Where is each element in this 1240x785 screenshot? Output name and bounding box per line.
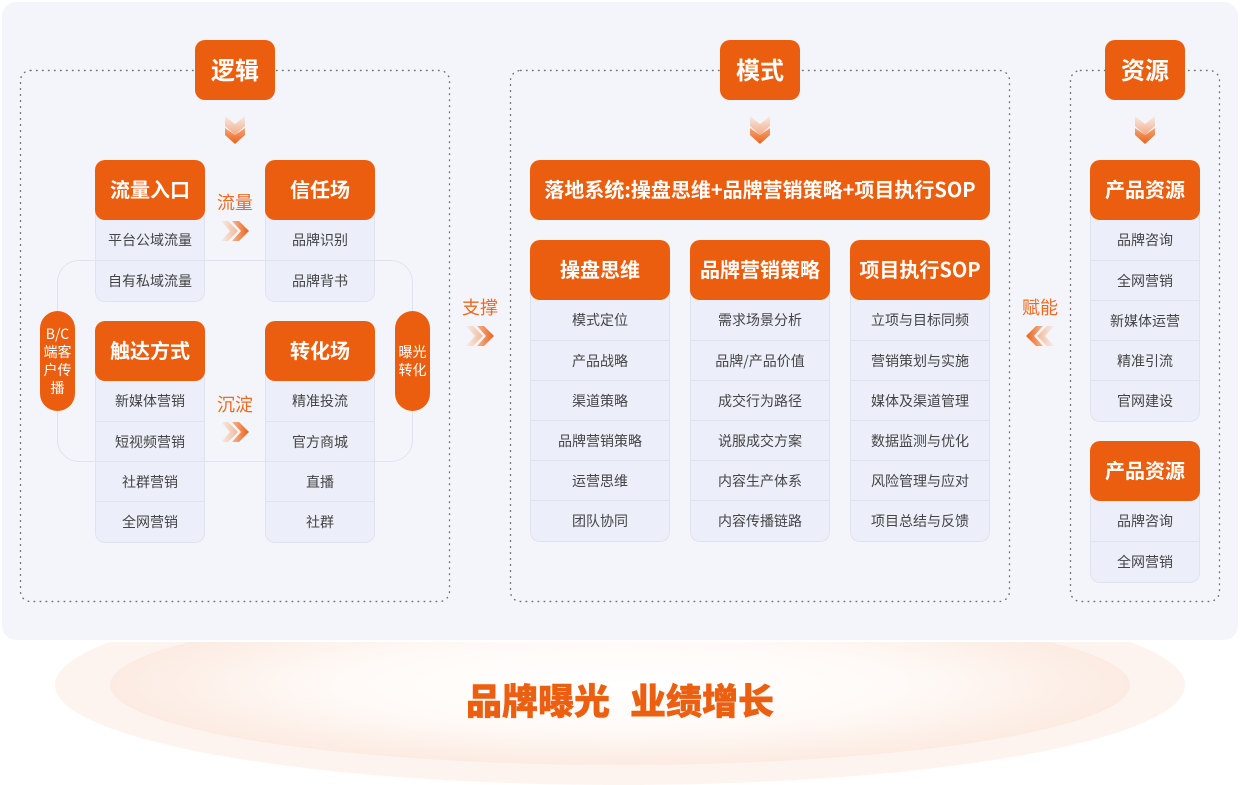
icon: right chevrons 流量 (221, 221, 249, 241)
card: 产品资源 bottom: 全网营销 (1117, 552, 1173, 572)
card: 流量入口: 自有私域流量 (108, 271, 192, 291)
card: 信任场: 品牌识别 (292, 230, 348, 250)
card: 流量入口: 平台公域流量 (108, 230, 192, 250)
card: 项目执行SOP: 媒体及渠道管理 (871, 391, 969, 411)
pill: B/C端客户传播: 端客 (44, 342, 72, 362)
card: 项目执行SOP: 立项与目标同频 (871, 310, 969, 330)
card: 品牌营销策略: 品牌/产品价值 (715, 351, 805, 371)
label: 沉淀: 沉淀 (217, 391, 253, 417)
card: 项目执行SOP: 项目总结与反馈 (871, 511, 969, 531)
card: 产品资源 top: 品牌咨询 (1117, 230, 1173, 250)
card: 触达方式: 全网营销 (122, 512, 178, 532)
card: 产品资源 top: 全网营销 (1117, 271, 1173, 291)
card: 操盘思维: 模式定位 (572, 310, 628, 330)
card: 品牌营销策略: 内容生产体系 (718, 471, 802, 491)
icon: right chevrons 沉淀 (221, 422, 249, 442)
card: 流量入口 (95, 160, 205, 302)
icon: right chevrons 支撑 (466, 326, 494, 346)
card: 产品资源 top: 官网建设 (1117, 391, 1173, 411)
card: 品牌营销策略: 需求场景分析 (718, 310, 802, 330)
card: 流量入口: 流量入口 (110, 174, 190, 203)
card: 品牌营销策略: 成交行为路径 (718, 391, 802, 411)
card: 信任场 (265, 160, 375, 302)
card: 品牌营销策略: 说服成交方案 (718, 431, 802, 451)
icon: down chevrons mode (750, 116, 770, 144)
card: 操盘思维: 品牌营销策略 (558, 431, 642, 451)
card: 转化场: 官方商城 (292, 432, 348, 452)
card: 转化场: 精准投流 (292, 391, 348, 411)
card: 信任场: 信任场 (290, 174, 350, 203)
card: 品牌营销策略: 品牌营销策略 (700, 254, 820, 283)
card: 触达方式 (95, 321, 205, 543)
card: 项目执行SOP: 数据监测与优化 (871, 431, 969, 451)
card: 操盘思维: 团队协同 (572, 511, 628, 531)
card: 产品资源 top: 产品资源 (1105, 174, 1185, 203)
heading: 逻辑: 逻辑 (211, 51, 259, 86)
card: 产品资源 top (1090, 160, 1200, 422)
card: 品牌营销策略 (690, 240, 830, 542)
card: 项目执行SOP (850, 240, 990, 542)
pill: B/C端客户传播: 播 (50, 378, 64, 398)
card: 产品资源 top: 精准引流 (1117, 351, 1173, 371)
heading: 逻辑 (195, 40, 275, 100)
heading: 资源 (1105, 40, 1185, 100)
pill: 曝光转化: 曝光 (398, 342, 426, 362)
card: 产品资源 bottom: 品牌咨询 (1117, 511, 1173, 531)
heading: 模式: 模式 (736, 51, 784, 86)
label: 流量: 流量 (217, 189, 253, 215)
pill: B/C端客户传播: 户传 (44, 360, 72, 380)
label: 赋能: 赋能 (1022, 294, 1058, 320)
pill: B/C端客户传播 (40, 311, 75, 411)
card: 触达方式: 触达方式 (110, 335, 190, 364)
base ellipses glow (55, 642, 1185, 785)
card: 转化场: 转化场 (290, 335, 350, 364)
banner: 落地系统 (530, 160, 990, 220)
banner: 落地系统: 落地系统:操盘思维+品牌营销策略+项目执行SOP (544, 174, 976, 203)
icon: left chevrons 赋能 (1026, 326, 1054, 346)
card: 操盘思维: 产品战略 (572, 351, 628, 371)
card: 操盘思维: 操盘思维 (560, 254, 640, 283)
card: 操盘思维: 渠道策略 (572, 391, 628, 411)
card: 品牌营销策略: 内容传播链路 (718, 511, 802, 531)
pill: 曝光转化: 转化 (398, 360, 426, 380)
heading: 资源: 资源 (1121, 51, 1169, 86)
label: 支撑: 支撑 (462, 294, 498, 320)
card: 操盘思维: 运营思维 (572, 471, 628, 491)
pill: 曝光转化 (395, 311, 430, 411)
card: 触达方式: 社群营销 (122, 472, 178, 492)
card: 产品资源 bottom (1090, 441, 1200, 583)
card: 转化场: 社群 (306, 512, 334, 532)
card: 产品资源 bottom: 产品资源 (1105, 455, 1185, 484)
icon: down chevrons logic (225, 116, 245, 144)
card: 转化场 (265, 321, 375, 543)
card: 信任场: 品牌背书 (292, 271, 348, 291)
card: 项目执行SOP: 项目执行SOP (859, 254, 981, 283)
heading: 模式 (720, 40, 800, 100)
card: 触达方式: 短视频营销 (115, 432, 185, 452)
connector loop (57, 260, 413, 462)
card: 转化场: 直播 (306, 472, 334, 492)
card: 触达方式: 新媒体营销 (115, 391, 185, 411)
card: 项目执行SOP: 风险管理与应对 (871, 471, 969, 491)
icon: down chevrons resource (1135, 116, 1155, 144)
card: 项目执行SOP: 营销策划与实施 (871, 351, 969, 371)
pill: B/C端客户传播: B/C (46, 324, 69, 344)
card: 操盘思维 (530, 240, 670, 542)
card: 产品资源 top: 新媒体运营 (1110, 311, 1180, 331)
slogan: 品牌曝光 业绩增长 (466, 673, 774, 725)
